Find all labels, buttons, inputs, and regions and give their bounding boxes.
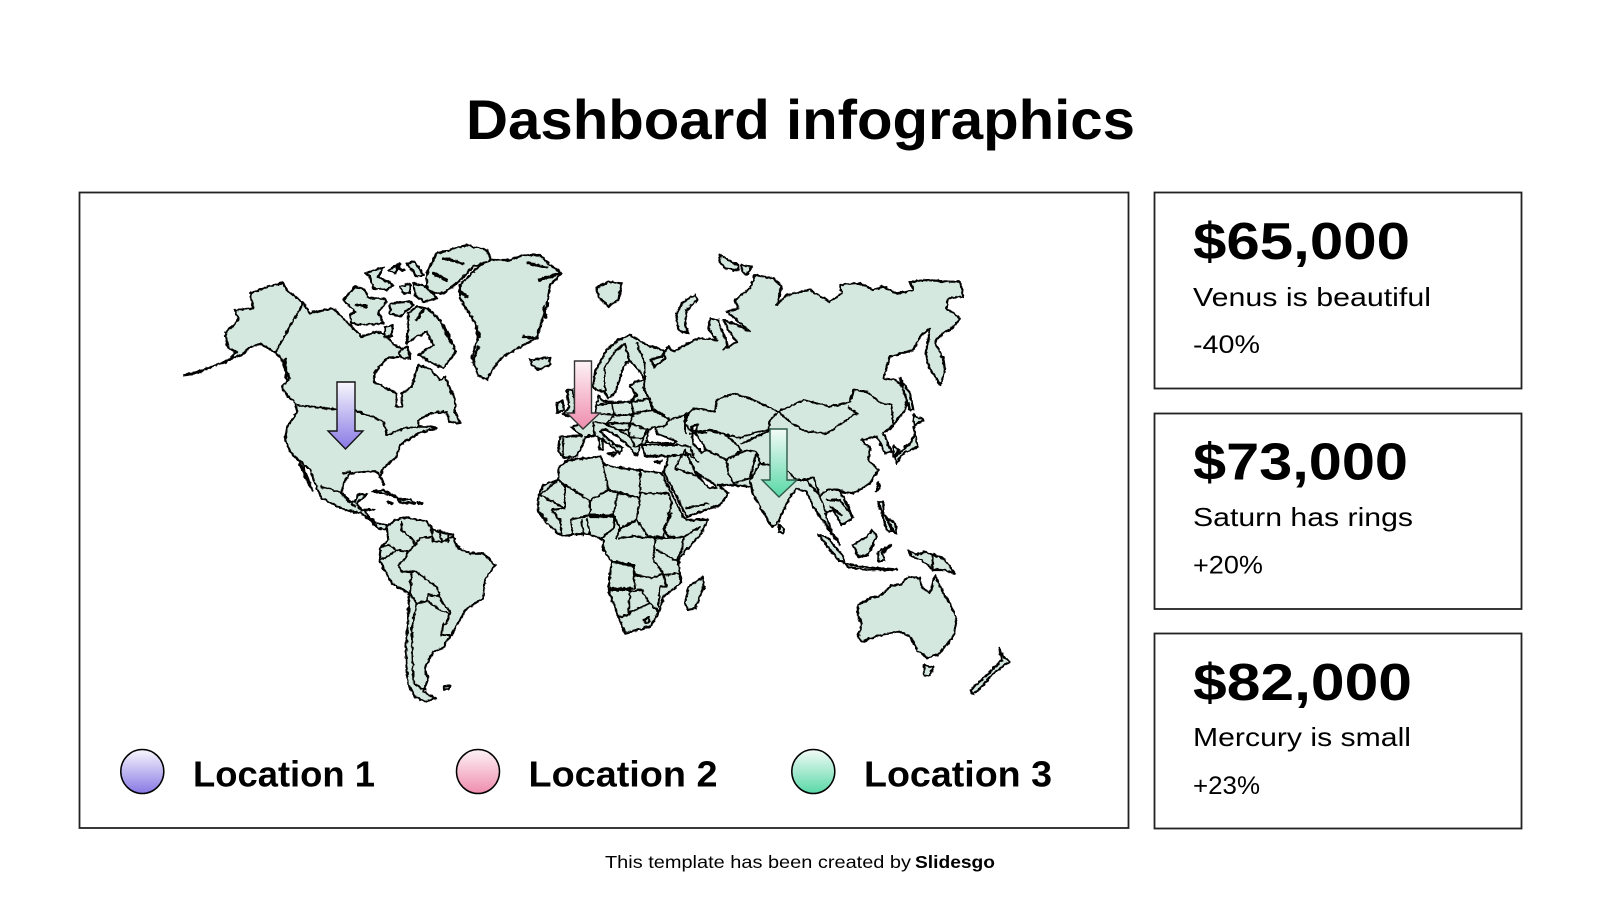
title: Dashboard infographics: [466, 88, 1135, 151]
map: North America and Greenland: [184, 245, 562, 529]
legend: location 1: [121, 750, 375, 794]
panel: stat card Saturn: Saturn has rings: [1193, 502, 1413, 532]
panel: world map and legend: [80, 192, 1128, 828]
panel: stat card Mercury: [1154, 634, 1522, 828]
footer credit: [605, 852, 995, 872]
world map: [184, 245, 1010, 702]
arrow: location 2: [567, 361, 600, 429]
legend: location 2: Location 2: [528, 754, 718, 794]
footer credit: This template has been created by: [605, 852, 911, 872]
panel: stat card Venus: Venus is beautiful: [1193, 282, 1431, 312]
panel: stat card Venus: -40%: [1193, 331, 1260, 359]
map: South America and Caribbean: [372, 490, 495, 702]
panel: stat card Mercury: +23%: [1193, 772, 1260, 800]
map: Asia borders: [675, 428, 852, 515]
panel: stat card Saturn: [1154, 414, 1522, 609]
legend: location 3: Location 3: [864, 754, 1052, 794]
panel: stat card Saturn: +20%: [1193, 552, 1263, 580]
arrow: location 3: [762, 429, 797, 497]
panel: stat card Mercury: $82,000: [1193, 654, 1412, 712]
panel: stat card Mercury: Mercury is small: [1193, 722, 1411, 752]
panel: stat card Venus: $65,000: [1193, 213, 1410, 271]
legend: location 2: [456, 750, 718, 794]
map: Europe borders and Black Sea: [563, 380, 707, 463]
legend: location 3: [792, 750, 1052, 794]
panel: stat card Venus: [1154, 192, 1522, 388]
arrow: location 1: [328, 382, 363, 449]
legend: location 1: Location 1: [193, 754, 375, 794]
map: Eurasia and islands: [557, 255, 963, 545]
map panel frame: [80, 192, 1128, 828]
panel: stat card Saturn: $73,000: [1193, 434, 1408, 492]
footer credit: Slidesgo: [915, 852, 995, 872]
map: Africa, Southeast Asia islands, Oceania: [538, 457, 1010, 694]
